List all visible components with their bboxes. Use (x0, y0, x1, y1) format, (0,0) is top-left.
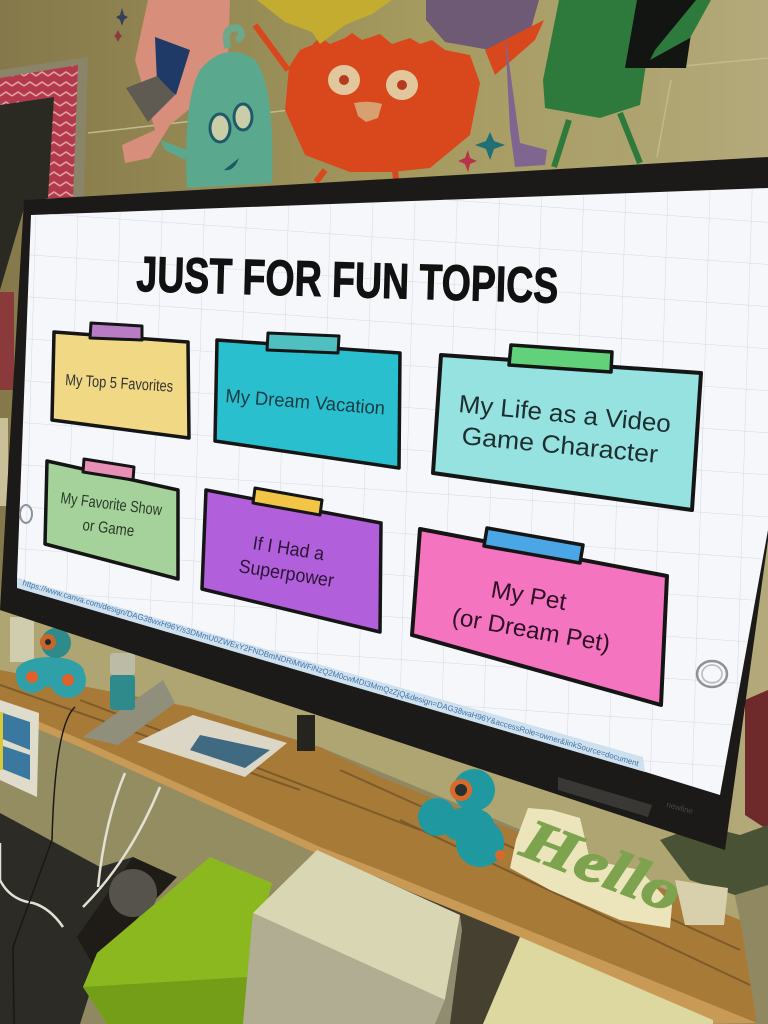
power strip (10, 617, 34, 662)
monitor control strip (558, 777, 652, 817)
card: My Pet (or Dream Pet) (412, 528, 667, 705)
monster: teal with glasses (160, 28, 272, 188)
white drawer unit right (483, 937, 713, 1024)
screen button right (697, 661, 727, 687)
monster: green (543, 0, 711, 167)
tape (267, 333, 339, 353)
monitor brand: newline (665, 800, 695, 816)
label: Game Character (460, 422, 659, 469)
tape (509, 345, 612, 372)
potted plant (660, 825, 768, 925)
green storage bin (83, 857, 272, 1024)
label: Superpower (237, 556, 336, 592)
cables (0, 707, 160, 1024)
card: My Favorite Show or Game (45, 459, 178, 579)
label (450, 576, 612, 658)
label: (or Dream Pet) (450, 603, 612, 658)
stars (114, 8, 505, 172)
monster: pink (122, 0, 230, 163)
label: My Life as a Video (457, 390, 672, 438)
red decoration right of monitor (745, 690, 768, 830)
label: My Pet (489, 576, 569, 616)
screen button left (20, 505, 32, 523)
card: My Top 5 Favorites (52, 323, 189, 438)
robot on shelf (418, 769, 505, 867)
label: My Favorite Show (60, 490, 163, 519)
monster: orange (255, 25, 480, 182)
printed paper on shelf (137, 715, 287, 777)
label: My Dream Vacation (225, 386, 386, 420)
small robot left (16, 628, 86, 698)
icon: laptop (126, 37, 190, 122)
card: My Dream Vacation (215, 333, 400, 468)
tape (90, 323, 142, 340)
wall below shelf (0, 713, 520, 1024)
tape (484, 528, 583, 563)
screen (17, 188, 768, 795)
label: or Game (82, 517, 135, 540)
white drawer unit left (243, 850, 462, 1024)
wall behind shelf (0, 610, 740, 920)
label: My Top 5 Favorites (65, 372, 174, 396)
monster: purple (426, 0, 547, 167)
label (60, 490, 163, 540)
address bar at screen bottom: https://www.canva.com/design/DAG38wxH96Y/s3DMmU0ZWExY2FNDBmNDRiMWFiNzQ2M0cwMDI3MmQzZjQ&design=DAG38waH96Y&accessRole=owner&linkSource=document (21, 578, 641, 768)
monster decorations (114, 0, 711, 188)
gray cloth on shelf (83, 680, 175, 745)
card: If I Had a Superpower (202, 488, 381, 632)
card: My Life as a Video Game Character (433, 345, 701, 510)
title: JUST FOR FUN TOPICS (136, 246, 559, 314)
left wall chart (0, 700, 39, 797)
label: If I Had a (251, 533, 326, 565)
tape (83, 459, 134, 480)
bulletin board on the wall (0, 57, 88, 506)
label (237, 533, 336, 592)
shelf (0, 670, 757, 1024)
monitor bezel (0, 157, 768, 850)
black device with globe (77, 857, 177, 965)
small green bottle (110, 653, 135, 710)
tape (253, 488, 322, 515)
hello sign: Hello (512, 805, 691, 925)
monster: yellow (257, 0, 392, 44)
label (457, 390, 672, 469)
